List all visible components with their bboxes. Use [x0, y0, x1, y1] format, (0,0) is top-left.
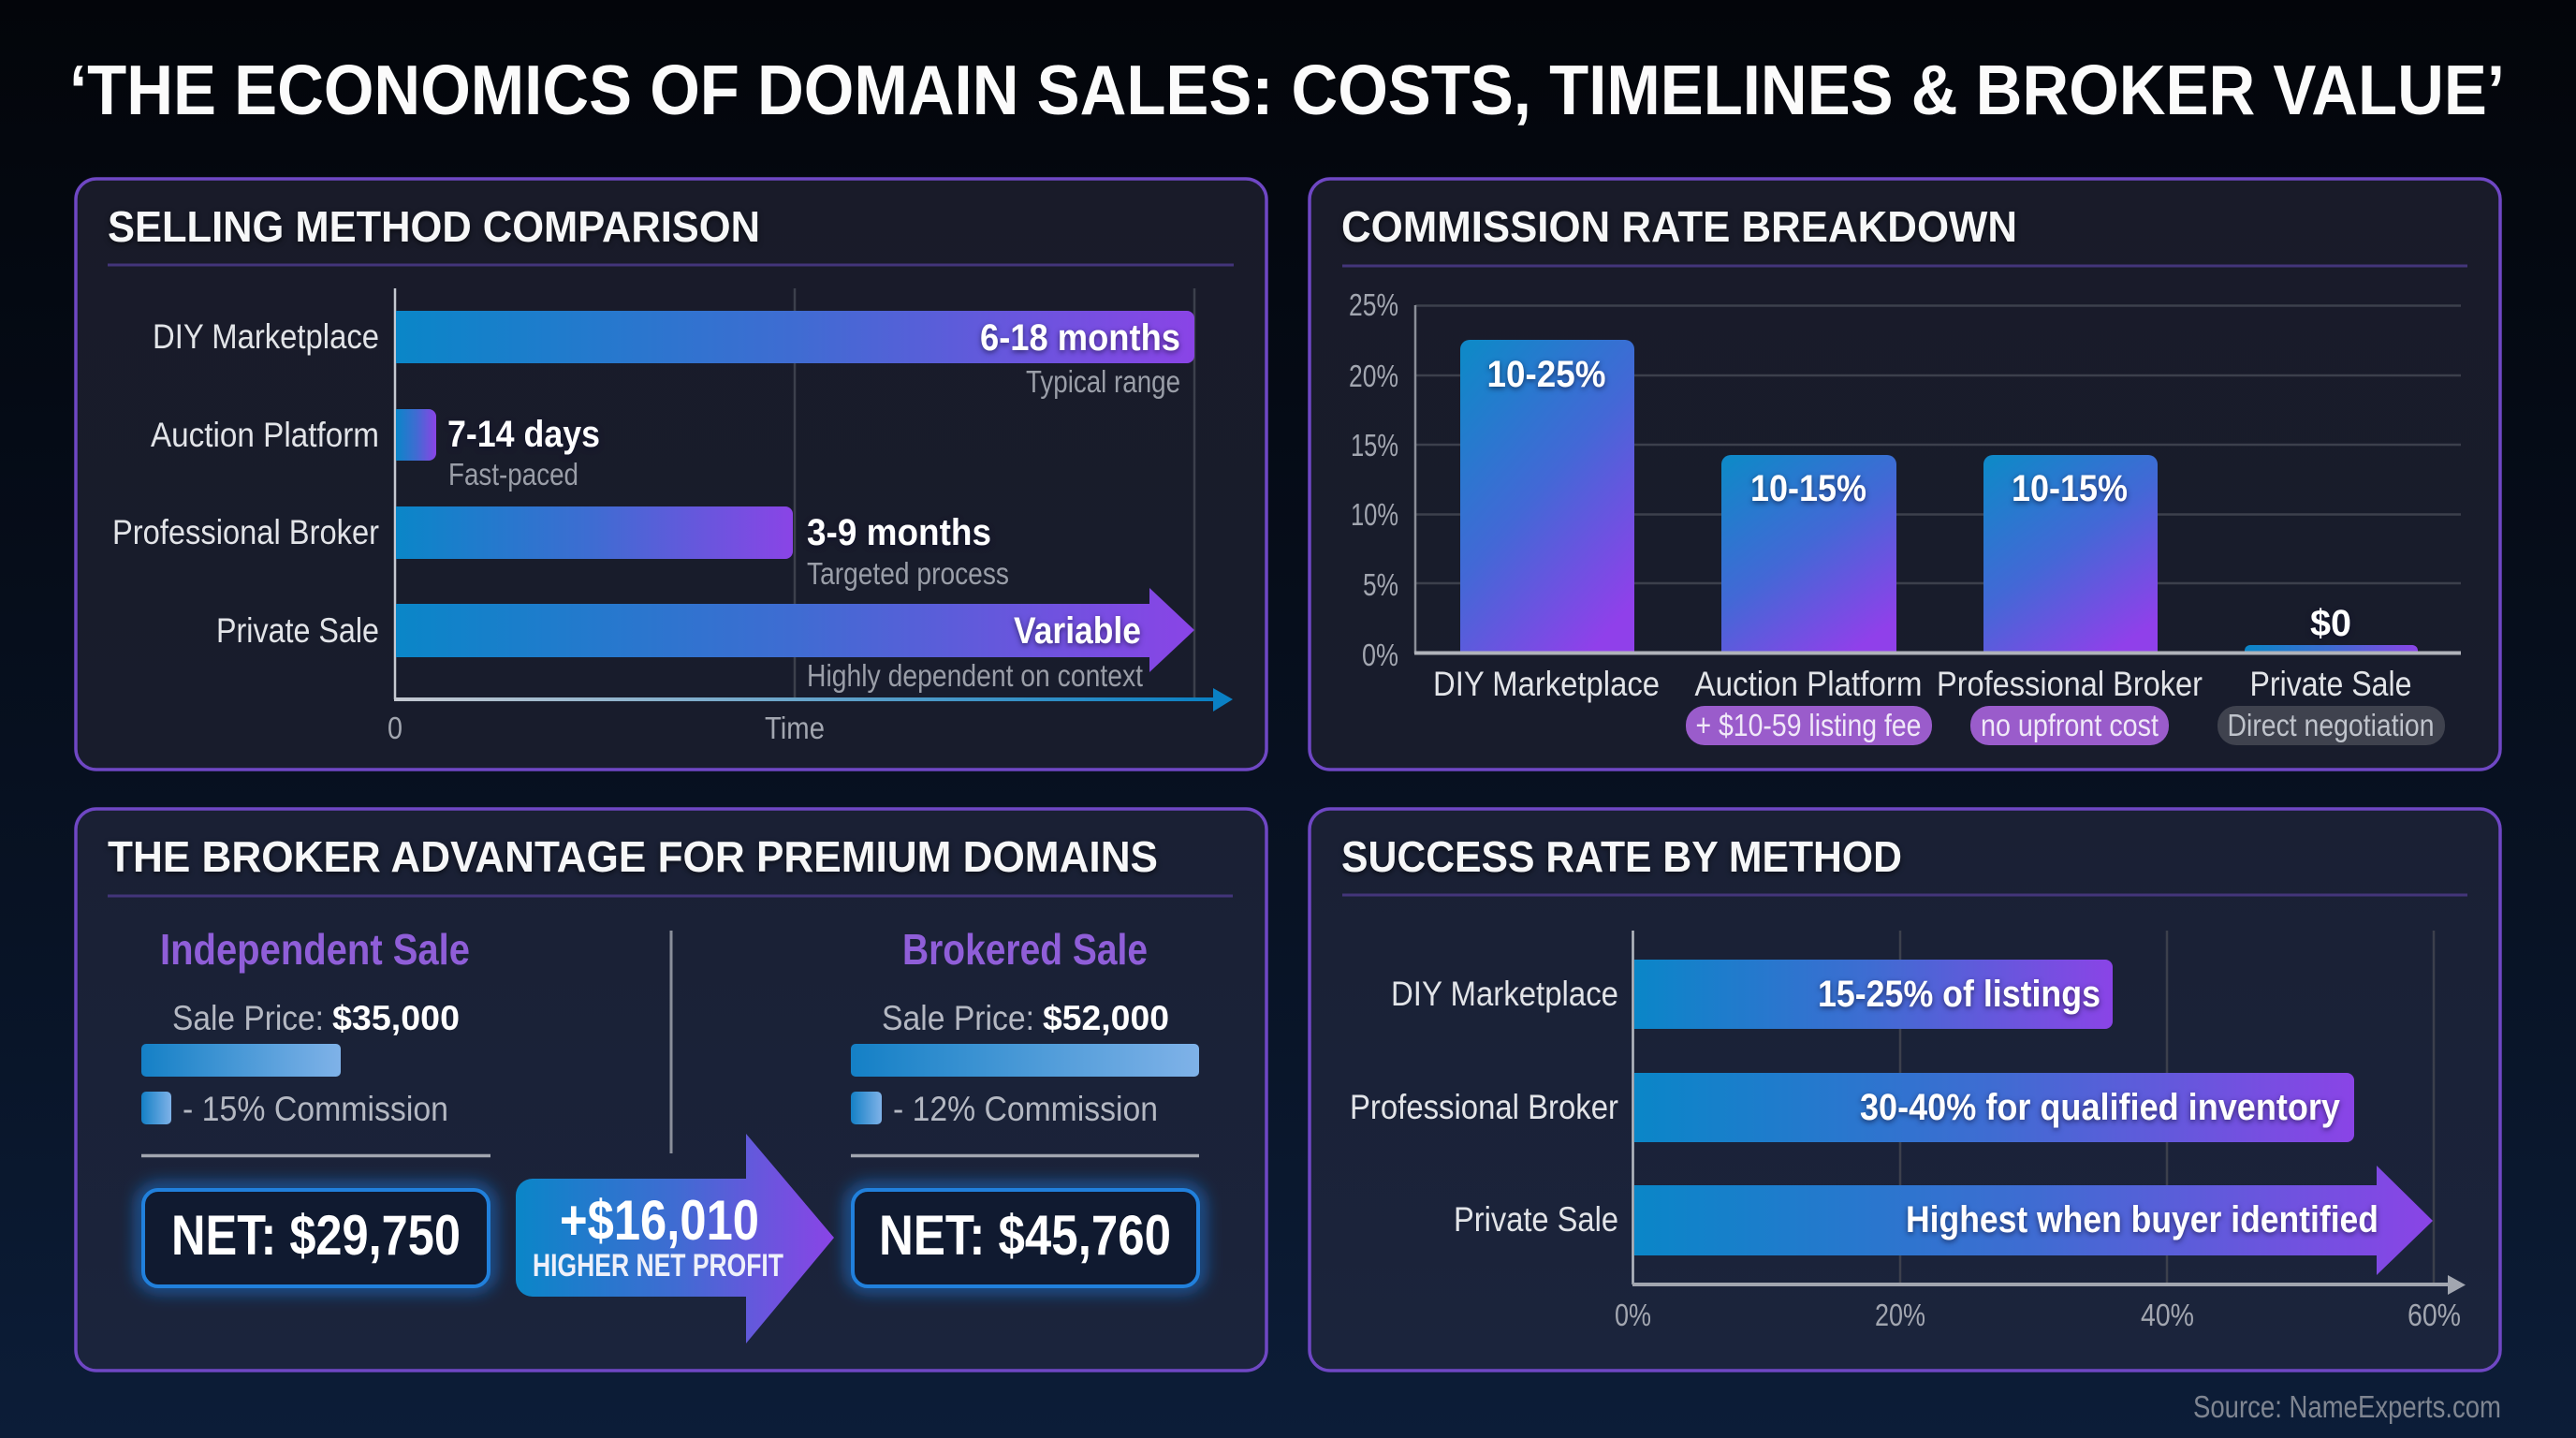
- pill: listing fee: + $10-59 listing fee: [1696, 708, 1921, 742]
- row: DIY Marketplace: Typical range: [1026, 364, 1180, 399]
- x axis with arrow: [1632, 1275, 2466, 1295]
- row: Auction Platform: Fast-paced: [448, 457, 578, 492]
- row: Professional Broker: Professional Broker: [1350, 1088, 1618, 1126]
- row: Professional Broker: 30-40% for qualified inventory: [1860, 1087, 2341, 1128]
- bar: DIY Marketplace: 10-25%: [1486, 354, 1606, 395]
- source note: Source: NameExperts.com: [2193, 1389, 2501, 1424]
- label: Auction Platform: Auction Platform: [1694, 665, 1923, 703]
- label: Professional Broker: Professional Broker: [1937, 665, 2203, 703]
- x axis labels: [1615, 1298, 2461, 1332]
- label: DIY Marketplace: DIY Marketplace: [1433, 665, 1660, 703]
- heading: success rate: SUCCESS RATE BY METHOD: [1341, 832, 1902, 881]
- panel: commission rate breakdown: [1310, 179, 2500, 770]
- row: Professional Broker: Targeted process: [807, 556, 1009, 591]
- column: independent sale: $35,000: [332, 999, 460, 1037]
- bar: Private Sale: $0: [2310, 603, 2351, 644]
- row: DIY Marketplace: [153, 311, 1194, 399]
- row: Private Sale: Variable: [1014, 610, 1141, 652]
- axis label: 0: 0: [388, 711, 402, 745]
- pill: no upfront cost: no upfront cost: [1981, 708, 2159, 742]
- net box: independent: NET: $29,750: [171, 1204, 461, 1267]
- panel: success rate by method: [1310, 809, 2500, 1371]
- y axis labels: 10%: [1351, 497, 1398, 532]
- column: brokered sale: Brokered Sale: [902, 925, 1148, 974]
- arrow: higher net profit: HIGHER NET PROFIT: [533, 1248, 783, 1284]
- y axis labels: 25%: [1349, 287, 1398, 322]
- column: independent sale: Sale Price:: [172, 999, 324, 1037]
- net box: brokered: NET: $45,760: [879, 1204, 1171, 1267]
- arrow: higher net profit: +$16,010: [560, 1189, 759, 1252]
- axis label: time: Time: [765, 711, 825, 745]
- row: DIY Marketplace: [1391, 960, 2113, 1029]
- y axis labels: 0%: [1362, 638, 1398, 672]
- net box: brokered: [852, 1189, 1199, 1286]
- x axis labels: 60%: [2408, 1298, 2461, 1332]
- panel: selling method comparison: [76, 179, 1266, 770]
- y axis labels: [1349, 287, 1398, 672]
- row: DIY Marketplace: DIY Marketplace: [1391, 975, 1618, 1013]
- row: Auction Platform: Auction Platform: [151, 416, 379, 454]
- y axis labels: 20%: [1349, 359, 1398, 393]
- row: Private Sale: [216, 588, 1194, 693]
- bar: Private Sale: [2245, 603, 2418, 653]
- row: Private Sale: Highly dependent on context: [807, 658, 1143, 693]
- bar: Auction Platform: [1721, 455, 1896, 653]
- y axis labels: 5%: [1363, 567, 1398, 602]
- row: Professional Broker: Professional Broker: [112, 513, 379, 551]
- row: DIY Marketplace: 6-18 months: [980, 317, 1180, 359]
- x axis labels: 20%: [1875, 1298, 1925, 1332]
- x axis labels: 40%: [2141, 1298, 2194, 1332]
- row: Auction Platform: 7-14 days: [447, 414, 600, 455]
- bar: Professional Broker: 10-15%: [2012, 468, 2128, 509]
- heading: commission rate breakdown: COMMISSION RATE BREAKDOWN: [1341, 202, 2017, 251]
- column: brokered sale: - 12% Commission: [893, 1090, 1158, 1128]
- x axis labels: 0%: [1615, 1298, 1651, 1332]
- row: Professional Broker: [112, 506, 1009, 591]
- net box: independent: [142, 1189, 490, 1286]
- bar: DIY Marketplace: [1460, 340, 1634, 653]
- bar: Auction Platform: 10-15%: [1750, 468, 1866, 509]
- y axis labels: 15%: [1351, 428, 1398, 462]
- bar: Professional Broker: [1983, 455, 2158, 653]
- column: independent sale: - 15% Commission: [183, 1090, 448, 1128]
- pill: direct negotiation: Direct negotiation: [2228, 708, 2434, 742]
- x axis with arrow: [394, 688, 1233, 712]
- column: brokered sale: [851, 925, 1199, 1155]
- row: Private Sale: Private Sale: [216, 611, 379, 650]
- column: independent sale: Independent Sale: [160, 925, 470, 974]
- row: Private Sale: Highest when buyer identified: [1906, 1199, 2378, 1240]
- row: Private Sale: Private Sale: [1454, 1200, 1618, 1239]
- row: Private Sale: [1454, 1166, 2433, 1275]
- arrow: higher net profit: [516, 1134, 834, 1343]
- row: DIY Marketplace: 15-25% of listings: [1818, 974, 2100, 1015]
- heading: broker advantage: THE BROKER ADVANTAGE FOR PREMIUM DOMAINS: [108, 832, 1158, 881]
- panel: the broker advantage: [76, 809, 1266, 1371]
- row: Auction Platform: [151, 409, 600, 492]
- row: Professional Broker: [1350, 1073, 2354, 1142]
- heading: selling method comparison: SELLING METHOD COMPARISON: [108, 202, 760, 251]
- row: DIY Marketplace: DIY Marketplace: [153, 317, 379, 356]
- column: brokered sale: $52,000: [1043, 999, 1169, 1037]
- column: independent sale: [141, 925, 490, 1155]
- column: brokered sale: Sale Price:: [882, 999, 1034, 1037]
- label: Private Sale: Private Sale: [2250, 665, 2411, 703]
- row: Professional Broker: 3-9 months: [807, 512, 991, 553]
